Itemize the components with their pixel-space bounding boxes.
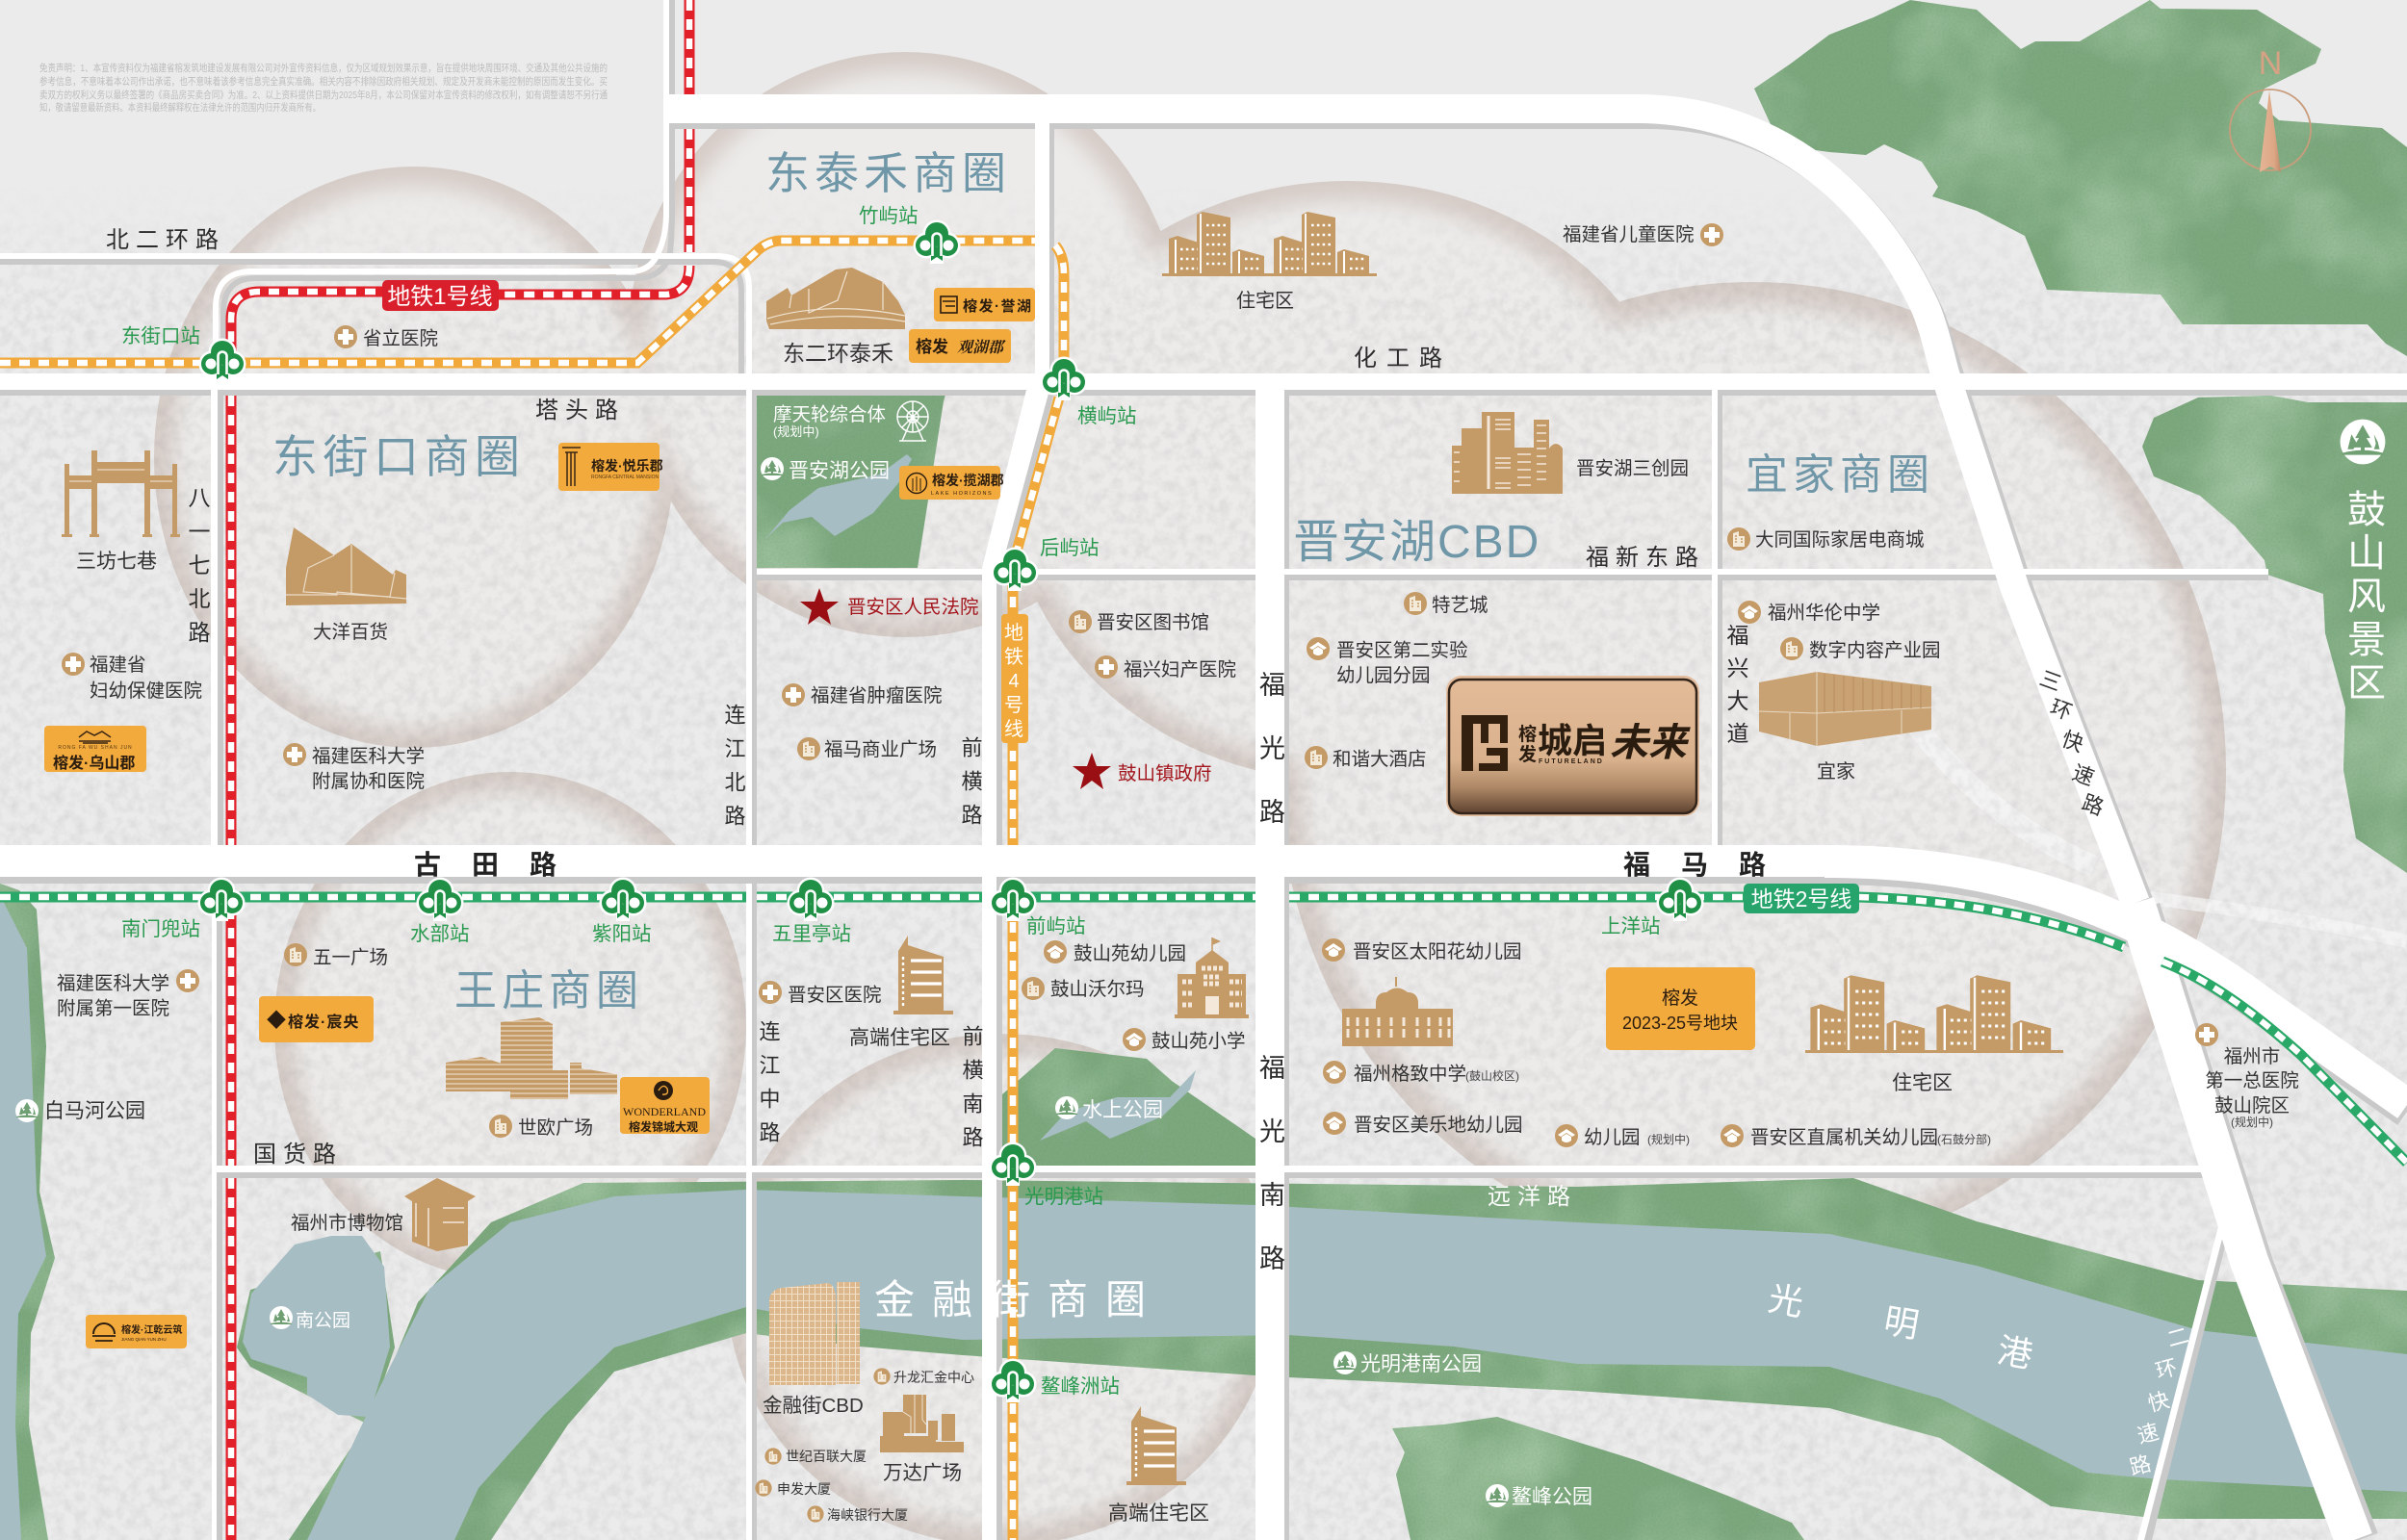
poi: wuyi square: 五一广场 [313,947,388,968]
illustration: housing south [1810,975,1925,1050]
business circle titles: 宜家商圈 [1746,451,1934,499]
label: housing north: 住宅区 [1236,290,1294,312]
poi: first general hospital: 第一总医院 [2205,1070,2299,1091]
light streak roads [1906,712,2407,941]
label: sanchuang: 晋安湖三创园 [1576,458,1689,479]
illustration: shiou mall [446,1017,617,1099]
poi: planned kindergarten: (规划中) [1647,1132,1690,1146]
metro line 4 label: 4 [1008,671,1020,692]
green park: jin'an lake labels [761,404,890,482]
logo wordmark: FUTURELAND [1539,758,1604,765]
poi: hexie hotel: 和谐大酒店 [1333,749,1427,770]
poi: first general hospital: (规划中) [2231,1115,2273,1129]
tag: lanhu jun: 榕发·揽湖郡 [932,473,1004,488]
label: high-end housing: 高端住宅区 [849,1027,950,1049]
tag: yuele jun: RONGFA CENTRAL MANSION [591,475,659,480]
poi: baima park: 白马河公园 [44,1100,145,1122]
road names: 国货路 [253,1142,343,1168]
poi: maternal hospital: 福建省 [90,654,146,676]
poi: gushanyuan kindergarten [1044,940,1186,964]
poi: digital park: 数字内容产业园 [1809,640,1941,661]
tag: yuhu: 榕发·誉湖 [963,297,1032,315]
tag: guanhu jun [909,329,1011,363]
illustration: dayang [286,527,406,605]
green park: jin'an lake labels: (规划中) [773,424,819,439]
poi: first hospital: 附属第一医院 [57,998,169,1019]
mountain north-east [1754,0,2407,356]
poi: first general hospital: 福州市 [2224,1046,2280,1067]
icon: ferris wheel [897,401,928,441]
station names: 鳌峰洲站 [1041,1375,1120,1398]
tag: chenyang: 榕发·宸央 [288,1013,359,1031]
tag: jiangqian yunzhu [86,1315,187,1348]
poi: provincial hospital: 省立医院 [363,328,438,349]
road names: 环 [2153,1355,2180,1383]
road names: 连江中路 [757,1020,780,1155]
road names: 福新东路 [1586,545,1705,571]
illustration: wanda [880,1395,964,1452]
business circle titles: 晋安湖CBD [1293,517,1540,568]
tag: lanhu jun: LAKE HORIZONS [931,491,993,497]
poi: sunflower kindergarten: 晋安区太阳花幼儿园 [1353,941,1522,962]
poi: maternity: 福兴妇产医院 [1124,659,1236,680]
poi: jinan hospital [759,981,882,1006]
metro line 1 label: 地铁1号线 [387,284,493,310]
baseline south [1805,1050,2063,1053]
station names: 东街口站 [121,325,200,347]
metro line 4 label: 铁 [1004,646,1023,668]
poi: gushan gov: 鼓山镇政府 [1118,763,1212,784]
illustration: ikea [1759,672,1931,746]
tag: chenyang [259,996,374,1042]
disclaimer text: 知，敬请留意最新资料。本资料最终解释权在法律允许的范围内归开发商所有。 [39,101,321,114]
main river [307,1190,2407,1540]
poi: gushanyuan kindergarten: 鼓山苑幼儿园 [1074,943,1186,964]
road names: 北二环路 [106,227,225,253]
poi: water park: 水上公园 [1082,1099,1163,1121]
poi: wuyi square [284,943,388,968]
business circle titles: 东街口商圈 [272,431,526,482]
tag: chenyang: ◆ [267,1010,286,1032]
road names: 明 [1881,1300,1922,1346]
poi: jinan hospital: 晋安区医院 [788,985,882,1006]
tag: wonderland: WONDERLAND [623,1105,706,1118]
illustration: finance cbd [769,1282,860,1385]
metro line 4 label: 地 [1004,622,1023,644]
road names: 福光路 [1255,671,1284,861]
business circle titles [272,148,1934,1322]
tag: land plot 2023-25 [1606,967,1755,1050]
label: finance cbd: 金融街CBD [763,1395,864,1417]
rivers and lakes [0,454,2407,1540]
poi: kindergarten 2: 幼儿园分园 [1336,665,1431,686]
poi: aofeng park: 鳌峰公园 [1512,1486,1592,1508]
logo wordmark [1518,721,1691,765]
water park hill [1002,1048,1255,1166]
road names: 塔头路 [535,398,625,424]
tag: wushan jun: 榕发·乌山郡 [53,754,135,772]
road names: 路 [2079,790,2107,820]
tag: land plot 2023-25: 榕发 [1662,988,1698,1009]
poi: gezhi [1323,1061,1519,1085]
road names: 福光南路 [1255,1054,1284,1308]
poi: straits bank: 海峡银行大厦 [827,1507,908,1523]
business circle titles: 王庄商圈 [454,967,643,1014]
illustration: housing north [1169,212,1264,274]
road names: 快 [2145,1388,2172,1416]
poi: children's hospital: 福建省儿童医院 [1563,224,1695,245]
disclaimer text: 卖双方的权利义务以最终签署的《商品房买卖合同》为准。2、以上资料提供日期为2025年8月，本公司保留对本宣传资料的修改权利，如有调整请恕不另行通 [39,89,608,101]
metro stations [198,219,1704,1402]
poi: gushan gov [1073,753,1212,789]
south park green bank [237,1251,395,1424]
road names: 路 [2127,1451,2154,1479]
road names [106,227,2191,1479]
road names: 古田路 [414,850,587,880]
poi: court: 晋安区人民法院 [847,597,979,618]
road names: 光 [1766,1278,1806,1323]
illustration: school [1175,937,1249,1018]
poi: shenfa [755,1479,831,1497]
logo mark [1462,715,1508,771]
poi: government kindergarten: 晋安区直属机关幼儿园 [1750,1127,1938,1148]
road names: 福马路 [1623,850,1797,880]
road names: 八一七北路 [185,486,210,654]
metro line 4 orange [0,241,1064,1540]
poi: fuma mall: 福马商业广场 [824,739,937,760]
tag: wushan jun [44,726,146,772]
poi: maternity [1095,655,1236,680]
left river green bank [0,884,55,1540]
poi: court [800,588,979,625]
tag: wonderland [620,1077,710,1134]
illustration: high-end housing south [1126,1406,1186,1485]
road names: 二 [2164,1323,2191,1351]
road names: 速 [2135,1420,2161,1448]
disc inner highlight [173,71,2203,1527]
poi: first general hospital [2195,1023,2299,1129]
poi: century bailian: 世纪百联大厦 [786,1449,867,1464]
poi: gezhi: 福州格致中学 [1354,1064,1466,1085]
icon: compass [2230,45,2311,172]
road names: 前横南路 [959,1025,984,1160]
road names: 福兴大道 [1723,624,1748,755]
poi: hualun school: 福州华伦中学 [1768,603,1880,624]
illustration: housing south 2 [1936,975,2051,1050]
poi: hexie hotel [1305,746,1427,770]
poi: teyi city [1404,592,1488,616]
road names: 连江北路 [722,704,745,838]
road names: 远洋路 [1488,1184,1577,1210]
illustration: housing north 2 [1274,212,1369,274]
poi: planned kindergarten: 幼儿园 [1584,1127,1641,1148]
logo wordmark: 城启 [1538,721,1607,760]
poi: government kindergarten: (石鼓分部) [1937,1132,1991,1146]
poi: shiou: 世欧广场 [518,1117,593,1139]
poi: cancer hospital: 福建省肿瘤医院 [811,685,943,706]
illustration: sanfang qixiang gate [62,450,180,537]
business circle titles: 金融街商圈 [874,1277,1163,1322]
label: ikea: 宜家 [1817,760,1855,783]
station names: 横屿站 [1077,405,1136,427]
label: dayang: 大洋百货 [313,622,388,643]
illustration: taihe mall [766,268,905,329]
illustration: sanchuang park [1452,412,1563,494]
tag: guanhu jun: 榕发 [916,337,948,356]
mountain east [2142,396,2407,873]
jinan lake park [756,395,945,568]
road names: 环 [2047,695,2075,725]
poi: kindergarten 2: 晋安区第二实验 [1336,640,1468,661]
tag: guanhu jun: 观湖郡 [957,335,1006,357]
icon: compass: N [2259,45,2282,82]
station names: 水部站 [410,923,470,945]
metro line 4 label: 号 [1004,695,1023,716]
disclaimer text [39,62,608,114]
tag: lanhu jun [899,466,1004,500]
road names: 港 [1995,1330,2035,1375]
jinan lake [765,454,912,539]
logo wordmark: 未来 [1610,722,1691,764]
metro line 2 label: 地铁2号线 [1751,886,1851,911]
poi: gushanyuan primary: 鼓山苑小学 [1152,1031,1246,1052]
poi: meledi kindergarten: 晋安区美乐地幼儿园 [1354,1115,1523,1136]
poi: shenfa: 申发大厦 [777,1481,831,1497]
station names: 后屿站 [1040,537,1100,559]
poi: library: 晋安区图书馆 [1097,612,1209,633]
tag: yuele jun [558,443,663,491]
tag: wonderland: 榕发锦城大观 [629,1119,698,1134]
station names: 竹屿站 [859,205,919,227]
poi: daton mall: 大同国际家居电商城 [1755,529,1925,551]
tag: jiangqian yunzhu: 榕发·江乾云筑 [121,1323,182,1336]
poi: shenglong: 升龙汇金中心 [893,1370,974,1385]
road names: 速 [2069,760,2097,790]
poi: water park [1055,1096,1163,1121]
tag: wushan jun: RONG FA WU SHAN JUN [58,745,133,751]
main river green band [289,1178,2407,1540]
logo wordmark: 发 [1518,743,1537,765]
green park: jin'an lake labels: 摩天轮综合体 [773,404,886,425]
metro line 2 green [0,897,2407,1163]
icon: gushan scenic area: 鼓山风景区 [2342,489,2385,706]
road names: 前横路 [959,736,982,837]
disclaimer text: 免责声明：1、本宣传资料仅为福建省榕发筑地建设发展有限公司对外宣传资料信息，仅为区域规划效果示意，旨在提供地块周围环境、交通及其他公共设施的 [39,62,608,74]
metro line 4 label [1001,614,1028,743]
label: sanfang: 三坊七巷 [76,551,157,573]
poi: provincial hospital [334,325,438,349]
logo wordmark: 榕 [1518,723,1537,745]
illustration: gezhi building [1342,977,1453,1046]
station names: 上洋站 [1601,915,1660,937]
green park: jin'an lake labels: 晋安湖公园 [789,460,890,482]
poi: xiehe hospital: 附属协和医院 [312,771,425,792]
poi: xiehe hospital [283,743,425,792]
label: wanda: 万达广场 [883,1462,962,1484]
poi: gushanyuan primary [1123,1028,1246,1052]
tag: yuele jun: 榕发·悦乐郡 [591,458,663,474]
road names: 化工路 [1354,346,1452,372]
poi: first hospital [57,969,199,1019]
tag: land plot 2023-25: 2023-25号地块 [1622,1014,1738,1033]
poi: government kindergarten [1721,1124,1991,1148]
poi: planned kindergarten [1555,1124,1690,1148]
poi: maternal hospital: 妇幼保健医院 [90,680,202,702]
poi: kindergarten 2 [1307,637,1468,686]
poi: teyi city: 特艺城 [1432,595,1488,616]
disclaimer text: 参考信息，不意味着本公司作出承诺，也不意味着该参考信息完全真实准确。相关内容不排除因政府相关规划、规定及开发商未能控制的原因而发生变化。买 [39,75,608,88]
label: museum: 福州市博物馆 [291,1213,403,1234]
south park lake [243,1236,390,1417]
poi: maternal hospital [62,653,202,702]
road names: 三 [2036,666,2064,696]
poi: shiou [489,1115,593,1139]
baima river [0,895,46,1540]
label: high-end housing south: 高端住宅区 [1108,1502,1209,1525]
poi: xiehe hospital: 福建医科大学 [312,746,425,767]
station names: 前屿站 [1026,915,1086,937]
water park lake [1040,1070,1196,1141]
poi: gezhi: (鼓山校区) [1465,1068,1519,1083]
aofeng park [1392,1417,1804,1540]
poi: south park [270,1306,350,1331]
poi: first hospital: 福建医科大学 [57,973,169,994]
illustration: high-end housing [893,936,953,1014]
metro line 1 red [231,0,689,1540]
metro line 4 label: 线 [1004,718,1023,740]
station names: 光明港站 [1024,1186,1103,1208]
poi: guangminggang south park: 光明港南公园 [1360,1353,1482,1375]
station names: 南门兜站 [121,918,200,940]
project logo plate [1446,676,1699,816]
station names [121,205,1660,1398]
tag: yuhu [934,288,1035,321]
poi: south park: 南公园 [296,1310,350,1331]
poi: first general hospital: 鼓山院区 [2214,1095,2290,1116]
tag: jiangqian yunzhu: JIANG QIAN YUN ZHU [121,1337,167,1342]
illustration: museum [404,1178,476,1251]
station names: 紫阳站 [592,923,651,945]
baseline [1162,273,1377,276]
road names: 快 [2058,727,2086,757]
label: housing south: 住宅区 [1892,1072,1953,1094]
label: taihe: 东二环泰禾 [783,341,893,366]
station names: 五里亭站 [772,923,851,945]
poi: walmart: 鼓山沃尔玛 [1050,979,1145,1000]
business circle titles: 东泰禾商圈 [765,148,1011,198]
poi: aofeng park [1486,1484,1592,1508]
